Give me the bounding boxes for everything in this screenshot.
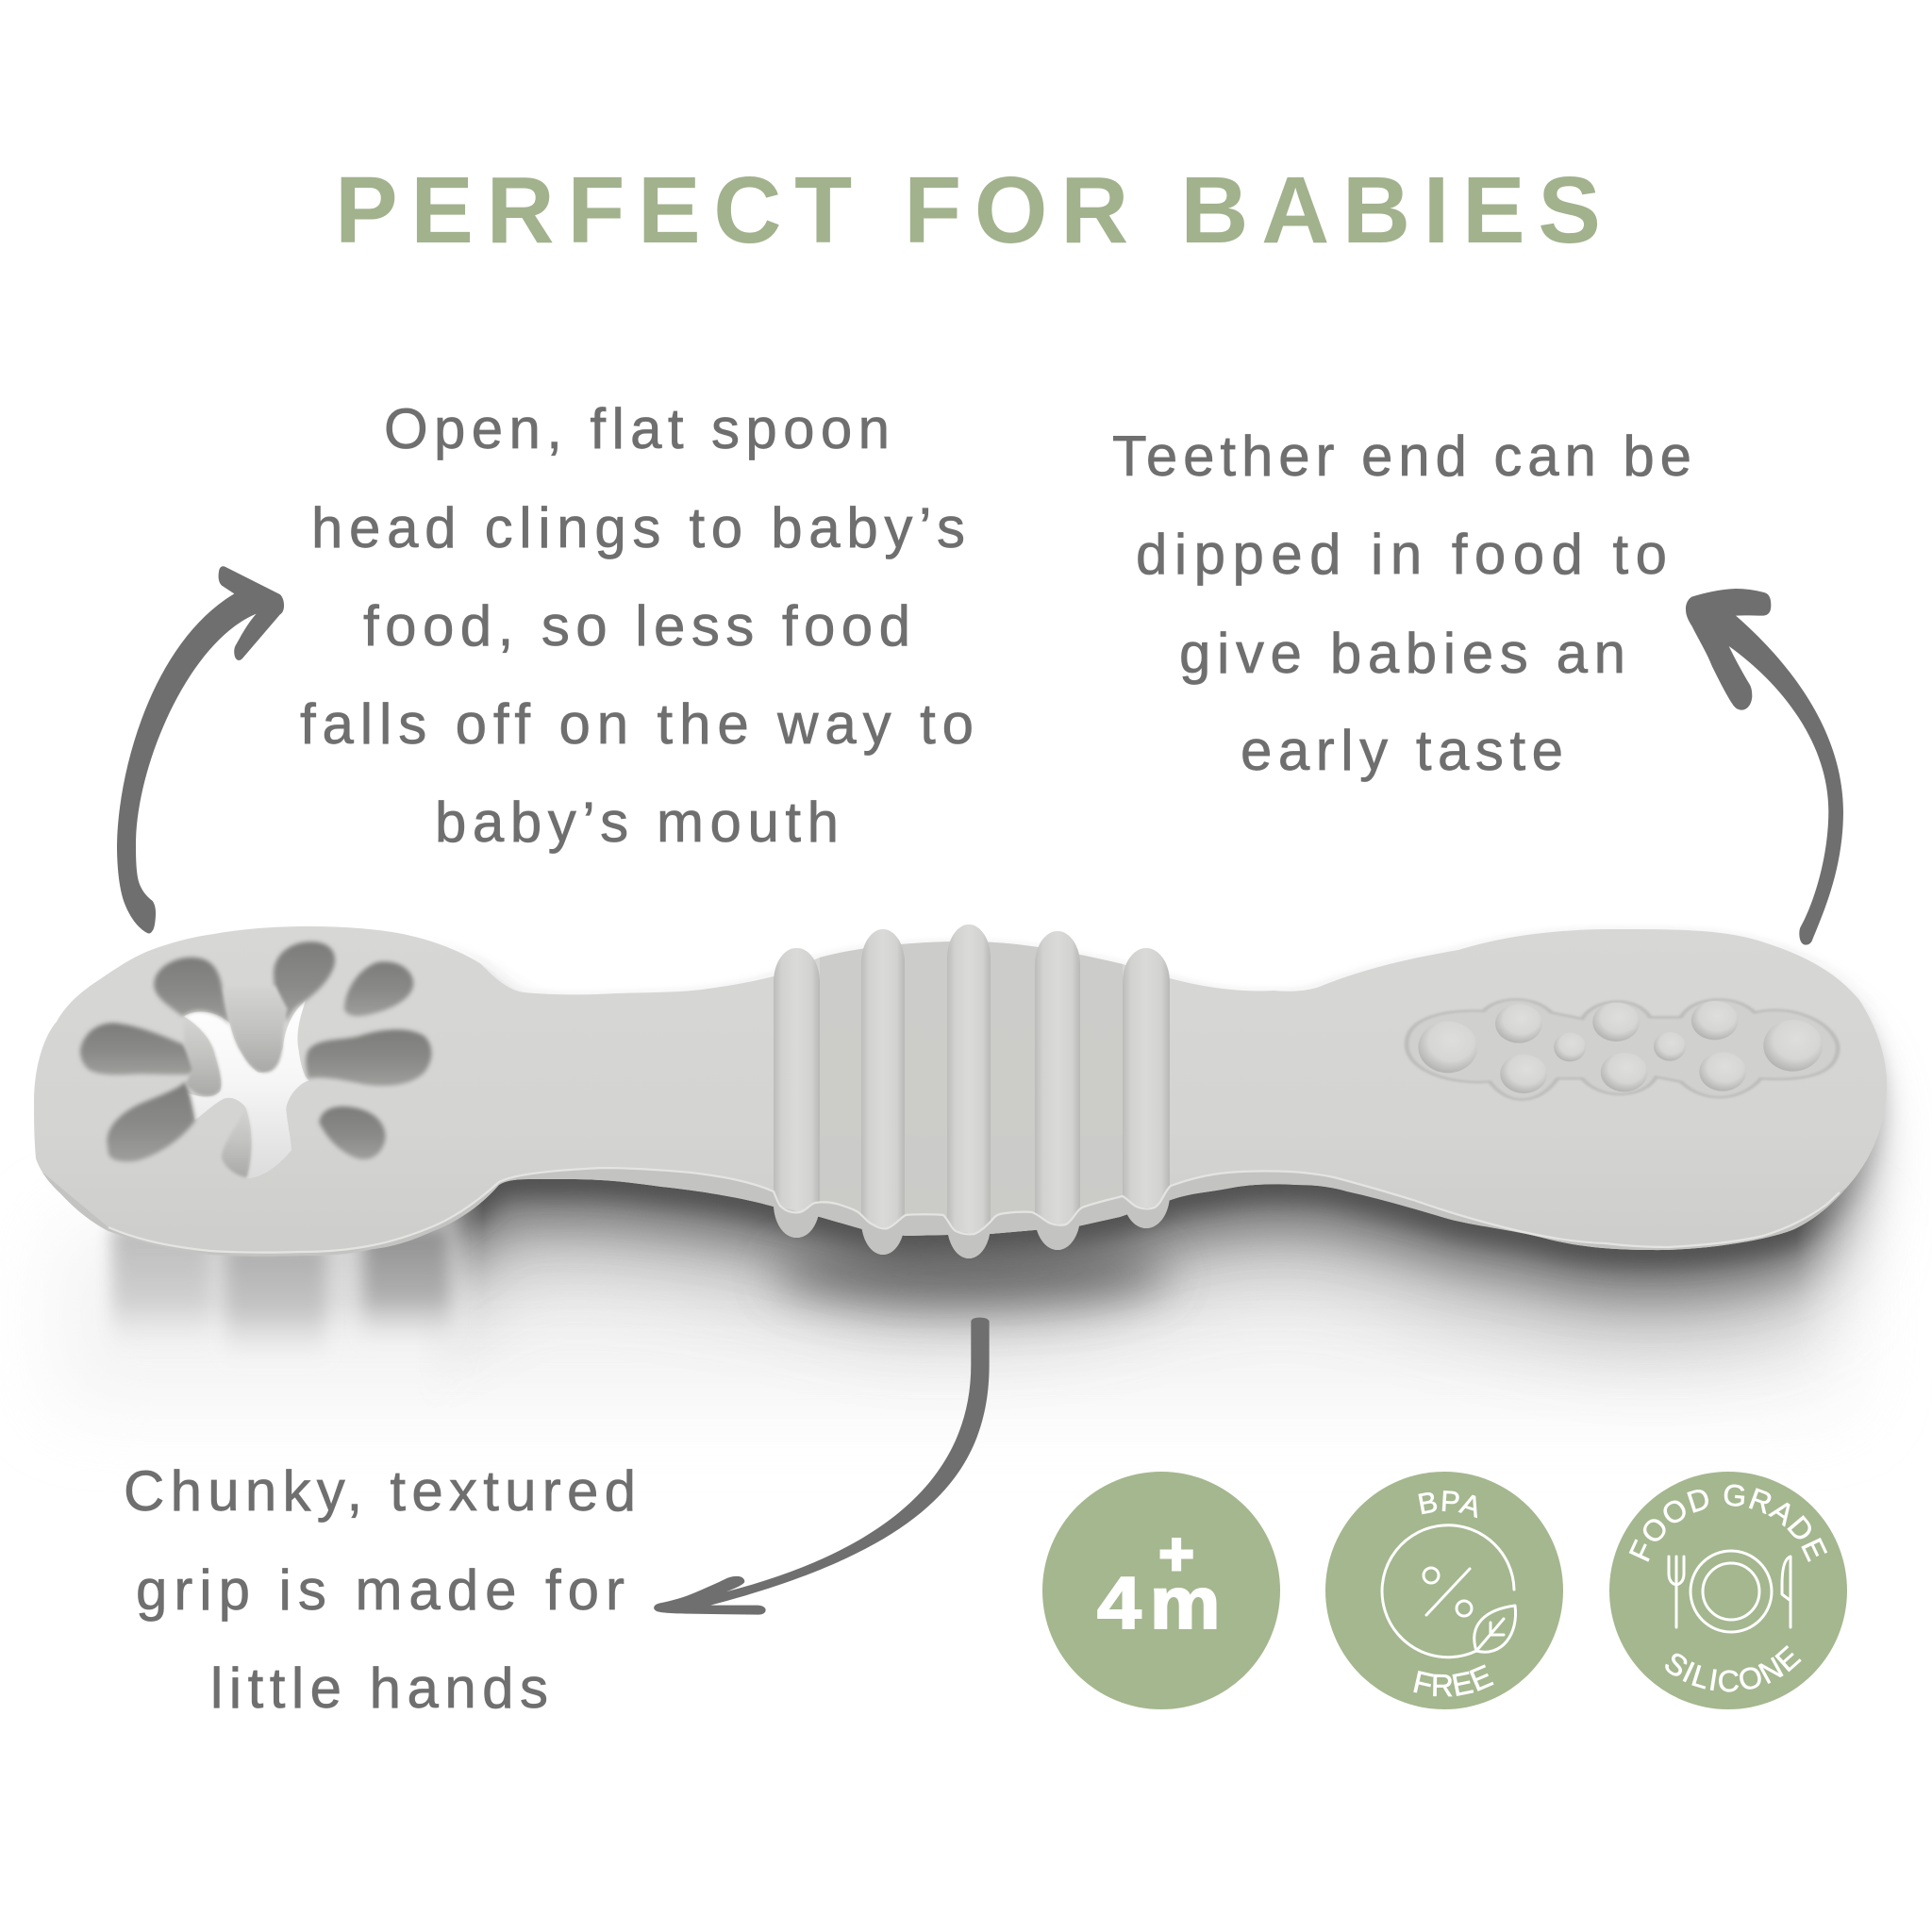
teether texture	[1407, 999, 1838, 1100]
inner walls	[184, 986, 288, 1177]
text block: spoon head	[300, 397, 974, 854]
text block: spoon head: food, so less food	[363, 594, 910, 658]
icon: percent in circle with leaf	[1382, 1525, 1516, 1657]
age label: 4m	[1097, 1563, 1221, 1644]
shadow stripes under spoon head	[111, 1226, 451, 1363]
text block: teether end: early taste	[1241, 719, 1563, 782]
text block: textured grip: little hands	[210, 1657, 548, 1720]
text block: spoon head: Open, flat spoon	[384, 397, 890, 460]
dark petals	[80, 941, 431, 1161]
arrow: to spoon head	[117, 566, 284, 934]
text block: textured grip: Chunky, textured	[124, 1459, 636, 1523]
title: PERFECT FOR BABIES	[335, 158, 1601, 263]
badge: BPA free	[1325, 1472, 1563, 1709]
product: silicone spoon with shadow	[19, 924, 1906, 1406]
see-through centre	[184, 1001, 308, 1178]
moulding highlight line	[108, 1168, 1840, 1253]
text block: teether end	[1112, 425, 1691, 782]
text block: spoon head: falls off on the way to	[300, 692, 974, 756]
text block: textured grip: grip is made for	[136, 1558, 625, 1622]
FREE label: FREE	[1413, 1664, 1494, 1696]
text block: textured grip	[124, 1459, 636, 1720]
FOOD GRADE label: FOOD GRADE	[1628, 1485, 1828, 1562]
text block: teether end: give babies an	[1179, 622, 1625, 685]
underside of spoon below moulding line	[42, 1170, 1846, 1258]
badge: food grade silicone	[1609, 1472, 1847, 1709]
BPA label: BPA	[1418, 1491, 1477, 1519]
plus sign: +	[1158, 1520, 1194, 1588]
text block: teether end: Teether end can be	[1112, 425, 1691, 488]
text block: teether end: dipped in food to	[1136, 523, 1667, 586]
spoon head openings	[80, 941, 431, 1178]
text block: spoon head: head clings to baby’s	[311, 496, 965, 559]
arrow: to teether end	[1686, 589, 1843, 945]
icon: plate and cutlery	[1669, 1551, 1790, 1632]
text block: spoon head: baby’s mouth	[435, 791, 839, 854]
cast shadow	[34, 943, 1887, 1406]
arrow: to textured grip	[654, 1318, 990, 1615]
badge: 4m+	[1042, 1472, 1280, 1709]
SILICONE label: SILICONE	[1665, 1645, 1802, 1692]
bumps	[1418, 1001, 1823, 1093]
grip ribs	[774, 924, 1170, 1258]
recessed outline	[1407, 999, 1838, 1100]
grip shaded centre	[820, 939, 1123, 1241]
spoon body	[34, 926, 1887, 1257]
